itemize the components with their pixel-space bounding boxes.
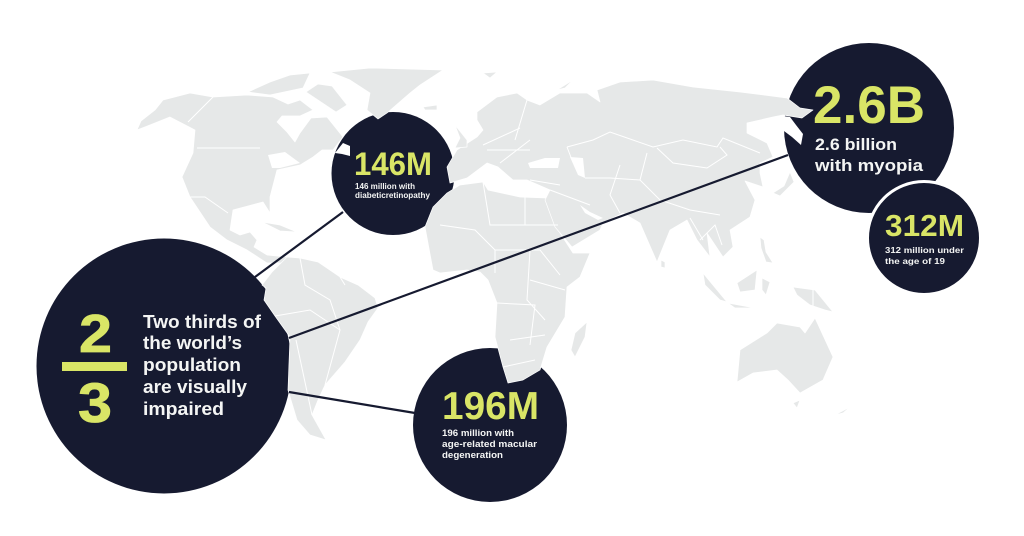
land: South America bbox=[262, 257, 378, 440]
circle: 2.6B background bbox=[784, 43, 954, 213]
2.6B description bbox=[814, 135, 924, 175]
fraction numerator: 2 bbox=[79, 304, 112, 364]
land: Arctic islands bbox=[483, 72, 573, 90]
146M description bbox=[355, 182, 431, 200]
world map bbox=[137, 68, 850, 440]
196M figure: 196M bbox=[442, 385, 539, 428]
land: Arctic Canada bbox=[248, 73, 310, 95]
land: Eurasia bbox=[447, 80, 813, 262]
312M description bbox=[885, 245, 965, 266]
inland seas bbox=[268, 152, 603, 220]
312M circle bbox=[868, 182, 980, 294]
white seas cutting the circles bbox=[335, 115, 803, 156]
312M description: the age of 19 bbox=[885, 256, 945, 266]
land: North America bbox=[137, 93, 343, 263]
two thirds text bbox=[143, 312, 262, 419]
circle: 146M background bbox=[332, 112, 454, 235]
land: Philippines bbox=[760, 237, 773, 263]
land: Iceland bbox=[423, 105, 437, 110]
two thirds text: the world’s bbox=[143, 333, 242, 353]
196M description: age-related macular bbox=[442, 439, 538, 449]
two thirds text: Two thirds of bbox=[143, 312, 262, 332]
196M description bbox=[442, 428, 538, 460]
146M description: diabeticretinopathy bbox=[355, 191, 431, 200]
circle: 196M background bbox=[413, 348, 567, 502]
fraction denominator: 3 bbox=[78, 371, 112, 434]
panel: 146M callout bbox=[354, 146, 432, 200]
land: Greenland bbox=[330, 68, 443, 119]
land: Madagascar bbox=[571, 322, 587, 357]
land: Japan bbox=[773, 172, 794, 196]
2.6B figure: 2.6B bbox=[813, 76, 925, 135]
312M description: 312 million under bbox=[885, 245, 965, 255]
panel: 2.6B callout bbox=[813, 76, 925, 175]
196M description: degeneration bbox=[442, 450, 503, 460]
land: Australia bbox=[737, 318, 833, 393]
land: Indonesia bbox=[703, 270, 770, 308]
panel: 196M callout bbox=[442, 385, 539, 460]
panel: two thirds callout bbox=[62, 304, 262, 434]
land: New Guinea bbox=[793, 287, 833, 312]
land: Africa bbox=[425, 182, 590, 383]
2.6B description: 2.6 billion bbox=[815, 135, 897, 154]
land: United Kingdom bbox=[455, 125, 467, 148]
312M figure: 312M bbox=[885, 208, 964, 243]
land: Tasmania and New Zealand bbox=[793, 400, 850, 415]
land: Sri Lanka bbox=[661, 260, 665, 268]
land: Cuba bbox=[262, 222, 297, 232]
2.6B description: with myopia bbox=[814, 156, 924, 175]
146M description: 146 million with bbox=[355, 182, 415, 191]
panel: 312M callout bbox=[868, 182, 980, 294]
two thirds text: are visually bbox=[143, 377, 247, 397]
fraction bar bbox=[62, 362, 127, 371]
connector lines bbox=[255, 155, 788, 413]
146M figure: 146M bbox=[354, 146, 432, 182]
country borders bbox=[188, 97, 813, 415]
circle: two thirds background bbox=[36, 238, 292, 494]
196M description: 196 million with bbox=[442, 428, 514, 438]
two thirds text: impaired bbox=[143, 399, 224, 419]
two thirds text: population bbox=[143, 355, 241, 375]
